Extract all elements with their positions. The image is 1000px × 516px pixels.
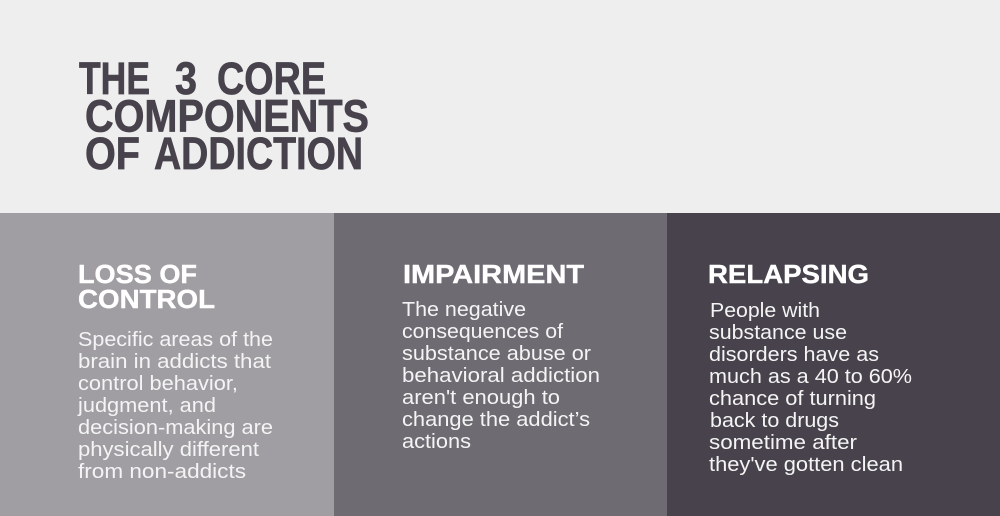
panel: impairment: [334, 213, 667, 516]
text block: relapsing description: disorders have as: [709, 344, 879, 366]
header band: [0, 0, 1000, 213]
panel: relapsing: [667, 213, 1000, 516]
text block: relapsing description: [709, 300, 912, 476]
text block: relapsing description: they've gotten clean: [709, 454, 903, 476]
title: COMPONENTS: [85, 90, 369, 142]
title: OF: [85, 128, 140, 179]
text block: impairment description: actions: [402, 431, 471, 453]
heading: loss of control: LOSS OF: [78, 259, 197, 289]
text block: loss of control description: judgment, and: [77, 395, 216, 417]
text block: relapsing description: back to drugs: [710, 410, 839, 432]
text block: impairment description: [402, 299, 600, 453]
text block: impairment description: substance abuse or: [402, 343, 591, 365]
text block: relapsing description: sometime after: [709, 432, 857, 454]
title: CORE: [217, 53, 326, 104]
text block: relapsing description: chance of turning: [709, 388, 876, 410]
text block: relapsing description: People with: [710, 300, 820, 322]
title: ADDICTION: [154, 128, 363, 179]
text block: relapsing description: substance use: [709, 322, 847, 344]
text block: impairment description: The negative: [402, 299, 526, 321]
text block: relapsing description: much as a 40 to 60%: [709, 366, 912, 388]
text block: impairment description: behavioral addiction: [402, 365, 600, 387]
text block: loss of control description: control behavior,: [78, 373, 238, 395]
text block: impairment description: consequences of: [402, 321, 563, 343]
text block: loss of control description: brain in addicts that: [78, 351, 271, 373]
heading: loss of control: CONTROL: [78, 284, 215, 314]
title: [79, 53, 369, 179]
title: THE: [79, 53, 150, 104]
text block: impairment description: change the addict’s: [402, 409, 590, 431]
title: 3: [175, 53, 197, 104]
heading: loss of control: [78, 259, 215, 314]
text block: impairment description: aren't enough to: [402, 387, 560, 409]
panel: loss of control: [0, 213, 334, 516]
text block: loss of control description: decision-making are: [78, 417, 273, 439]
text block: loss of control description: physically different: [78, 439, 259, 461]
text block: loss of control description: Specific areas of the: [78, 329, 273, 351]
heading: relapsing: RELAPSING: [708, 259, 869, 289]
text block: loss of control description: from non-addicts: [78, 461, 246, 483]
heading: impairment: IMPAIRMENT: [403, 259, 584, 289]
text block: loss of control description: [77, 329, 273, 483]
